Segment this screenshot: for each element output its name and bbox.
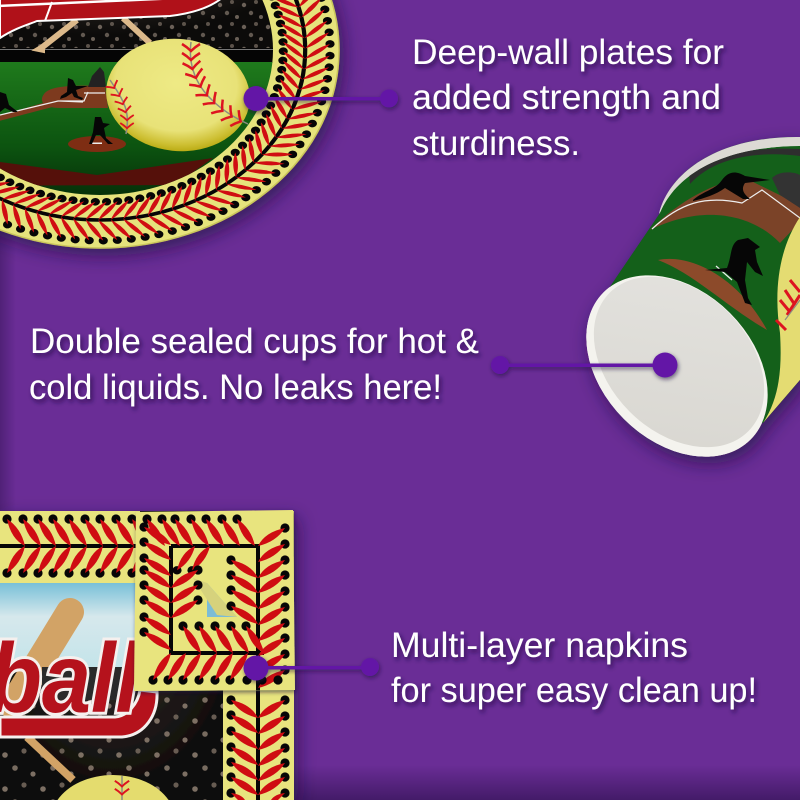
napkins xyxy=(0,510,295,800)
cup rim xyxy=(659,137,800,214)
text: plates xyxy=(412,33,724,163)
top napkin band xyxy=(0,511,150,583)
plate rim xyxy=(0,0,339,248)
paper plate xyxy=(0,0,354,266)
sky panel xyxy=(0,583,140,667)
callout: cup connector xyxy=(491,352,678,378)
callout: napkin connector xyxy=(244,656,379,680)
softball on plate xyxy=(101,32,255,158)
text: plates: sturdiness. xyxy=(412,124,580,163)
text: plates: Deep-wall plates for xyxy=(412,33,724,72)
cup artwork xyxy=(603,146,800,423)
softball on napkin xyxy=(58,775,168,800)
text: napkins: for super easy clean up! xyxy=(391,671,757,710)
cup body xyxy=(550,137,800,493)
cup base xyxy=(550,239,800,493)
bat xyxy=(13,612,73,780)
text: napkins: Multi-layer napkins xyxy=(391,626,688,665)
text: cups: cold liquids. No leaks here! xyxy=(29,368,442,407)
stadium dots xyxy=(0,690,223,800)
text: plates: added strength and xyxy=(412,78,721,117)
red banner xyxy=(0,690,157,737)
rim stitching xyxy=(0,0,398,295)
lower right stitching xyxy=(226,690,290,800)
paper cup xyxy=(580,134,800,474)
lower napkin print xyxy=(0,511,294,800)
dark panel behind lettering xyxy=(42,667,136,700)
plate ballpark scene xyxy=(0,0,280,202)
folded napkin corner xyxy=(134,510,295,691)
callout: plate connector xyxy=(244,86,398,111)
text: cups: Double sealed cups for hot & xyxy=(30,322,479,361)
text: cups xyxy=(29,322,479,407)
text: napkins xyxy=(391,626,757,710)
